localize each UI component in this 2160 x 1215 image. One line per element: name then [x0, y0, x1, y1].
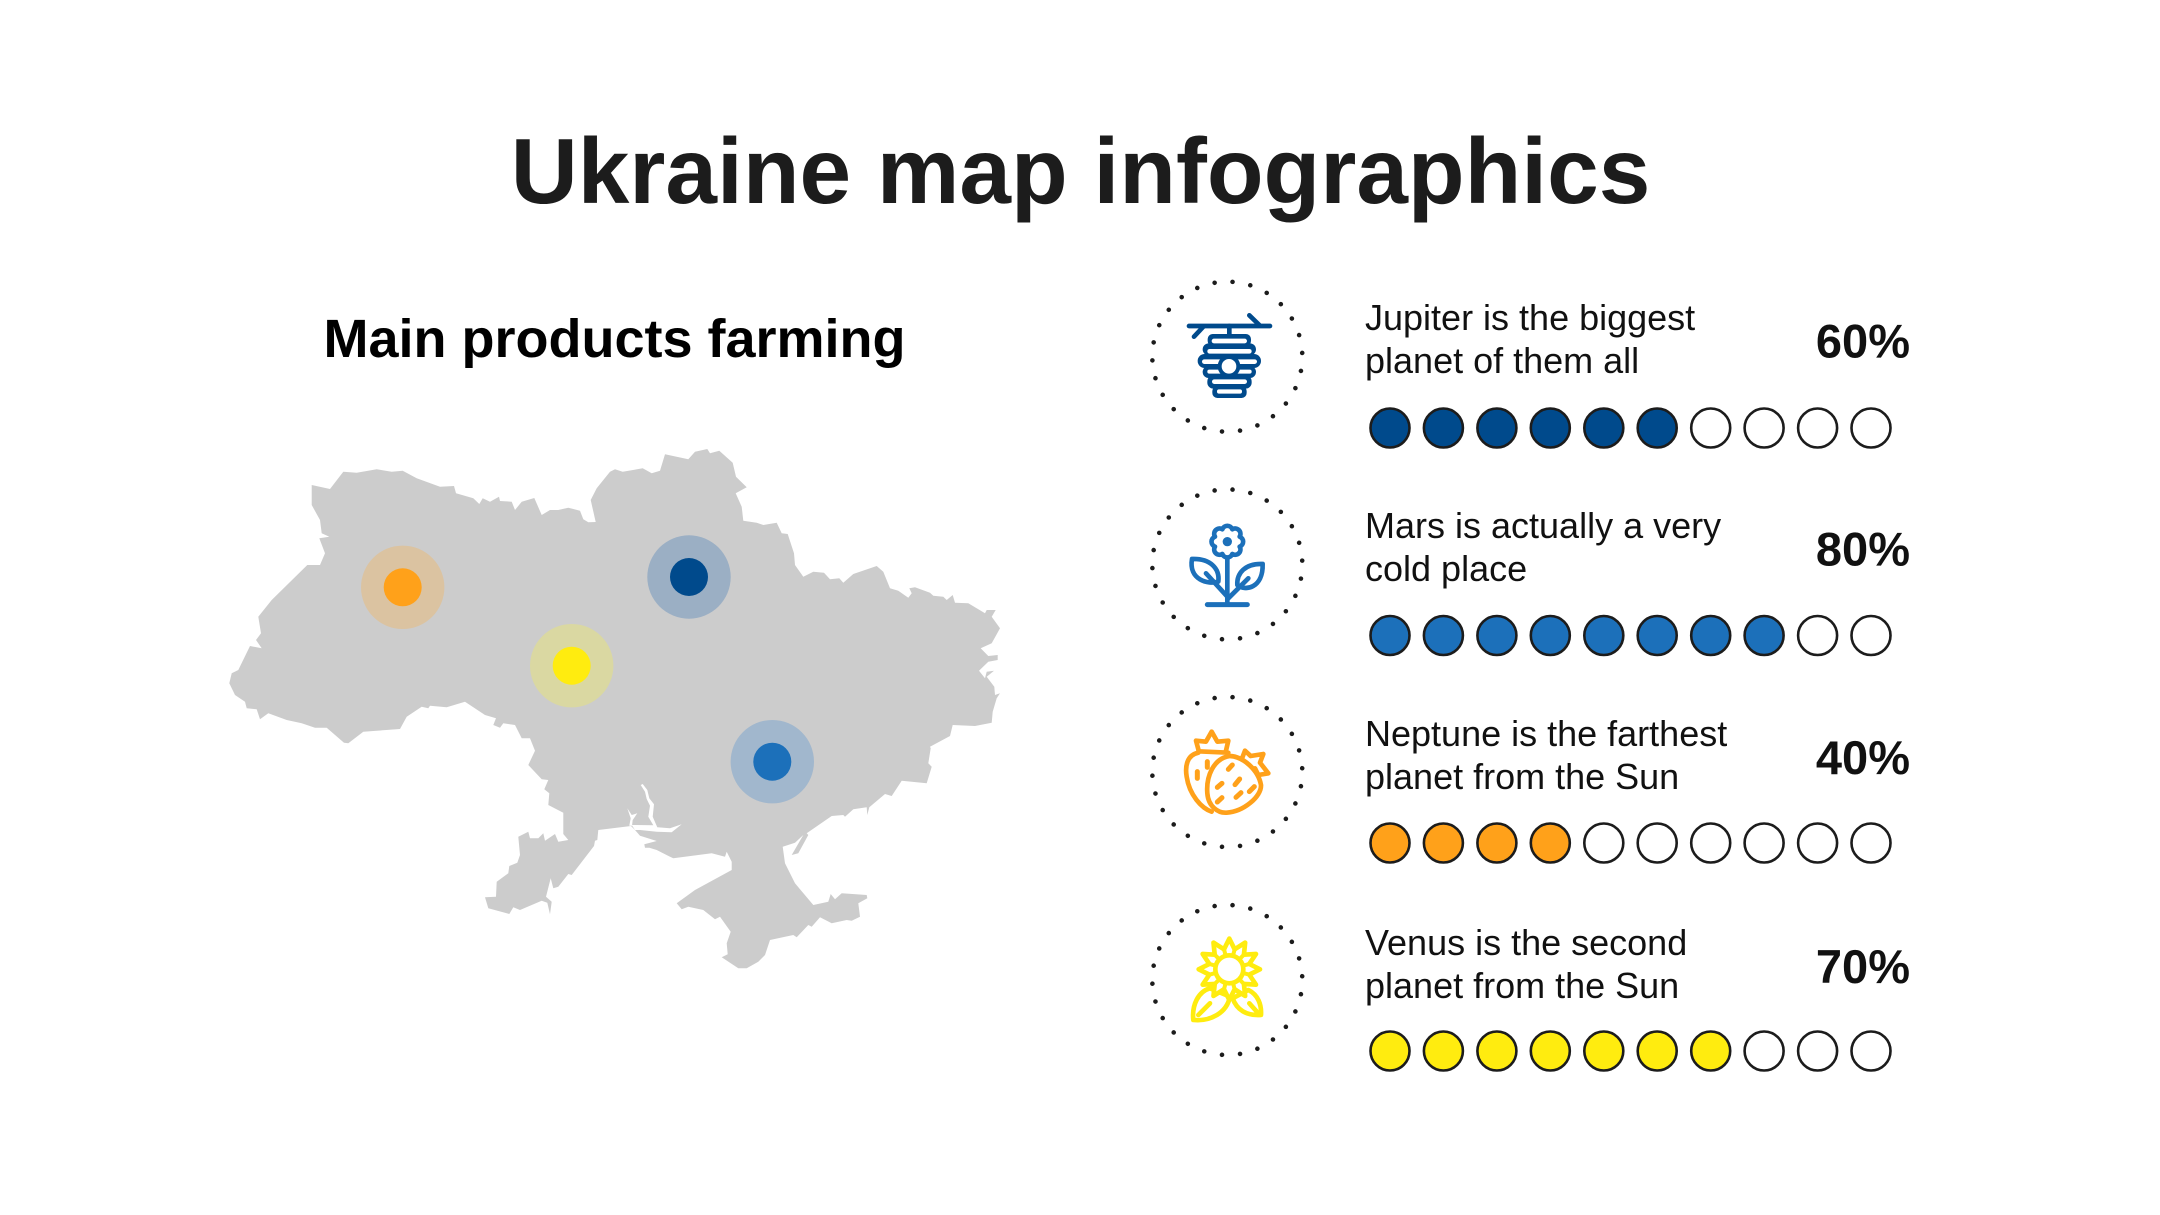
pictogram: 8 of 10 — [1370, 616, 1890, 655]
marker: yellow — [530, 624, 613, 707]
panel: row 3 strawberry — [1147, 692, 1910, 862]
text: description: planet of them all — [1365, 340, 1639, 381]
subheading: main products farming: Main products farming — [323, 309, 906, 369]
text: description: Mars is actually a very — [1365, 505, 1721, 546]
value: 80%: 80% — [1816, 522, 1910, 576]
text: description: planet from the Sun — [1365, 756, 1679, 797]
icon: flower in dotted ring — [1147, 484, 1307, 644]
title: Ukraine map infographics — [511, 119, 1650, 223]
panel: row 4 sunflower — [1147, 900, 1910, 1070]
marker: dark blue — [647, 535, 731, 619]
panel: row 1 honey — [1147, 277, 1910, 448]
icon: beehive in dotted ring — [1147, 277, 1307, 437]
text: description: Venus is the second — [1365, 922, 1687, 963]
value: 40%: 40% — [1816, 731, 1910, 784]
pictogram: 7 of 10 — [1370, 1032, 1890, 1070]
marker: blue — [731, 720, 814, 803]
text: description: planet from the Sun — [1365, 965, 1679, 1006]
value: 70%: 70% — [1816, 940, 1910, 993]
value: 60%: 60% — [1816, 314, 1910, 368]
panel: row 2 flower — [1147, 484, 1910, 655]
pictogram: 4 of 10 — [1370, 824, 1890, 862]
marker: orange — [361, 546, 444, 629]
icon: strawberries in dotted ring — [1147, 692, 1307, 852]
panel: Ukraine map — [229, 449, 1000, 968]
icon: sunflower in dotted ring — [1147, 900, 1307, 1060]
text: description: Jupiter is the biggest — [1365, 297, 1695, 338]
text: description: Neptune is the farthest — [1365, 713, 1727, 754]
map silhouette — [229, 449, 1000, 968]
text: description: cold place — [1365, 548, 1527, 589]
pictogram: 6 of 10 — [1370, 408, 1890, 448]
